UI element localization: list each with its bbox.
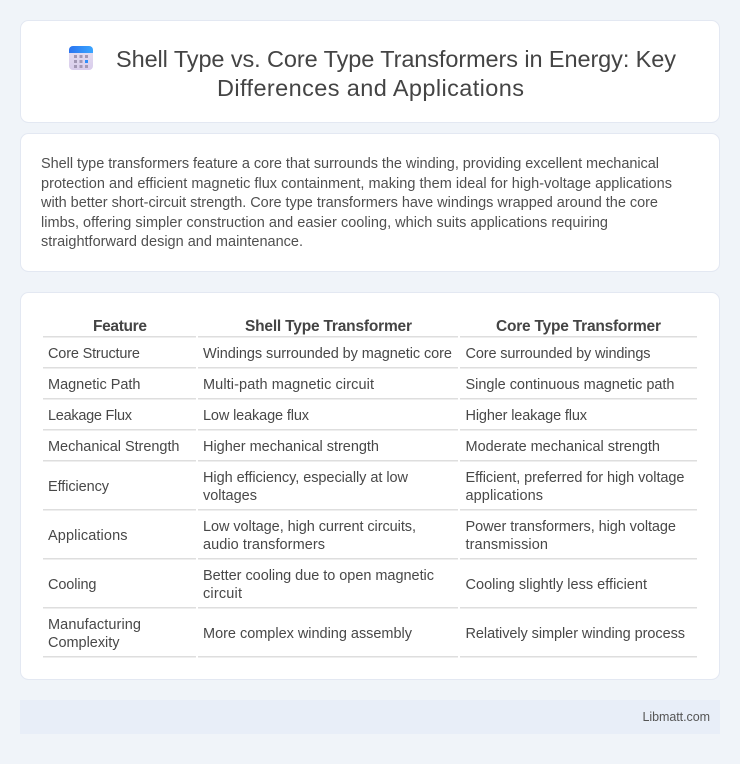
title: [116, 46, 676, 101]
row: core structure: [48, 346, 650, 362]
row: efficiency: High efficiency, especially at low: [203, 470, 409, 486]
row: applications: [48, 519, 676, 553]
row: magnetic path: Magnetic Path: [48, 377, 140, 393]
row: applications: Low voltage, high current circuits,: [203, 519, 416, 535]
row: applications: audio transformers: [203, 537, 325, 553]
row: manufacturing complexity: Relatively simpler winding process: [466, 626, 685, 642]
row: manufacturing complexity: Complexity: [48, 635, 120, 651]
row: cooling: Cooling: [48, 577, 96, 593]
intro text: with better short-circuit strength. Core type transformers have windings wrapped around the core: [40, 195, 658, 211]
row: mechanical strength: [48, 439, 660, 455]
intro text: limbs, offering simpler construction and easier cooling, which suits applications requiring: [41, 215, 608, 231]
row: leakage flux: Low leakage flux: [203, 408, 310, 424]
row: magnetic path: Multi-path magnetic circuit: [203, 377, 374, 393]
title: Shell Type vs. Core Type Transformers in Energy: Key: [116, 46, 676, 72]
row: magnetic path: Single continuous magnetic path: [466, 377, 674, 393]
row: mechanical strength: Mechanical Strength: [48, 439, 180, 455]
row: manufacturing complexity: [48, 617, 685, 651]
intro text: Shell type transformers feature a core that surrounds the winding, providing excellent mechanical: [41, 156, 659, 172]
table header row: Core Type Transformer: [496, 318, 661, 335]
row: applications: Power transformers, high voltage: [466, 519, 676, 535]
row: manufacturing complexity: Manufacturing: [48, 617, 141, 633]
header panel: [20, 20, 720, 122]
intro text: [40, 156, 672, 250]
intro text: protection and efficient magnetic flux containment, making them ideal for high-voltage applications: [41, 176, 672, 192]
table header row: Feature: [93, 318, 147, 335]
row: cooling: circuit: [203, 586, 242, 602]
row: cooling: Better cooling due to open magnetic: [203, 568, 434, 584]
row: mechanical strength: Higher mechanical strength: [203, 439, 379, 455]
row: efficiency: Efficiency: [48, 479, 110, 495]
row: efficiency: Efficient, preferred for high voltage: [466, 470, 684, 486]
row: cooling: Cooling slightly less efficient: [466, 577, 647, 593]
row: leakage flux: Leakage Flux: [48, 408, 133, 424]
footer credit: Libmatt.com: [642, 710, 710, 724]
table header row: Shell Type Transformer: [245, 318, 412, 335]
row: core structure: Core surrounded by windings: [466, 346, 650, 362]
row: efficiency: voltages: [203, 488, 257, 504]
row: leakage flux: Higher leakage flux: [466, 408, 588, 424]
row: mechanical strength: Moderate mechanical strength: [466, 439, 660, 455]
row: magnetic path: [48, 377, 674, 393]
table panel: [20, 292, 720, 680]
row: efficiency: [48, 470, 684, 504]
intro text: straightforward design and maintenance.: [41, 234, 303, 250]
icon: calendar grid: [69, 46, 93, 70]
row: cooling: [48, 568, 647, 602]
title: Differences and Applications: [217, 75, 524, 101]
table rules: [43, 336, 697, 658]
row: leakage flux: [48, 408, 588, 424]
footer bar: [20, 700, 720, 734]
row: applications: transmission: [466, 537, 548, 553]
row: core structure: Windings surrounded by magnetic core: [203, 346, 452, 362]
row: core structure: Core Structure: [48, 346, 140, 362]
row: applications: Applications: [48, 528, 128, 544]
row: efficiency: applications: [466, 488, 543, 504]
row: manufacturing complexity: More complex winding assembly: [203, 626, 413, 642]
table header row: [93, 318, 661, 335]
intro panel: [20, 134, 720, 272]
